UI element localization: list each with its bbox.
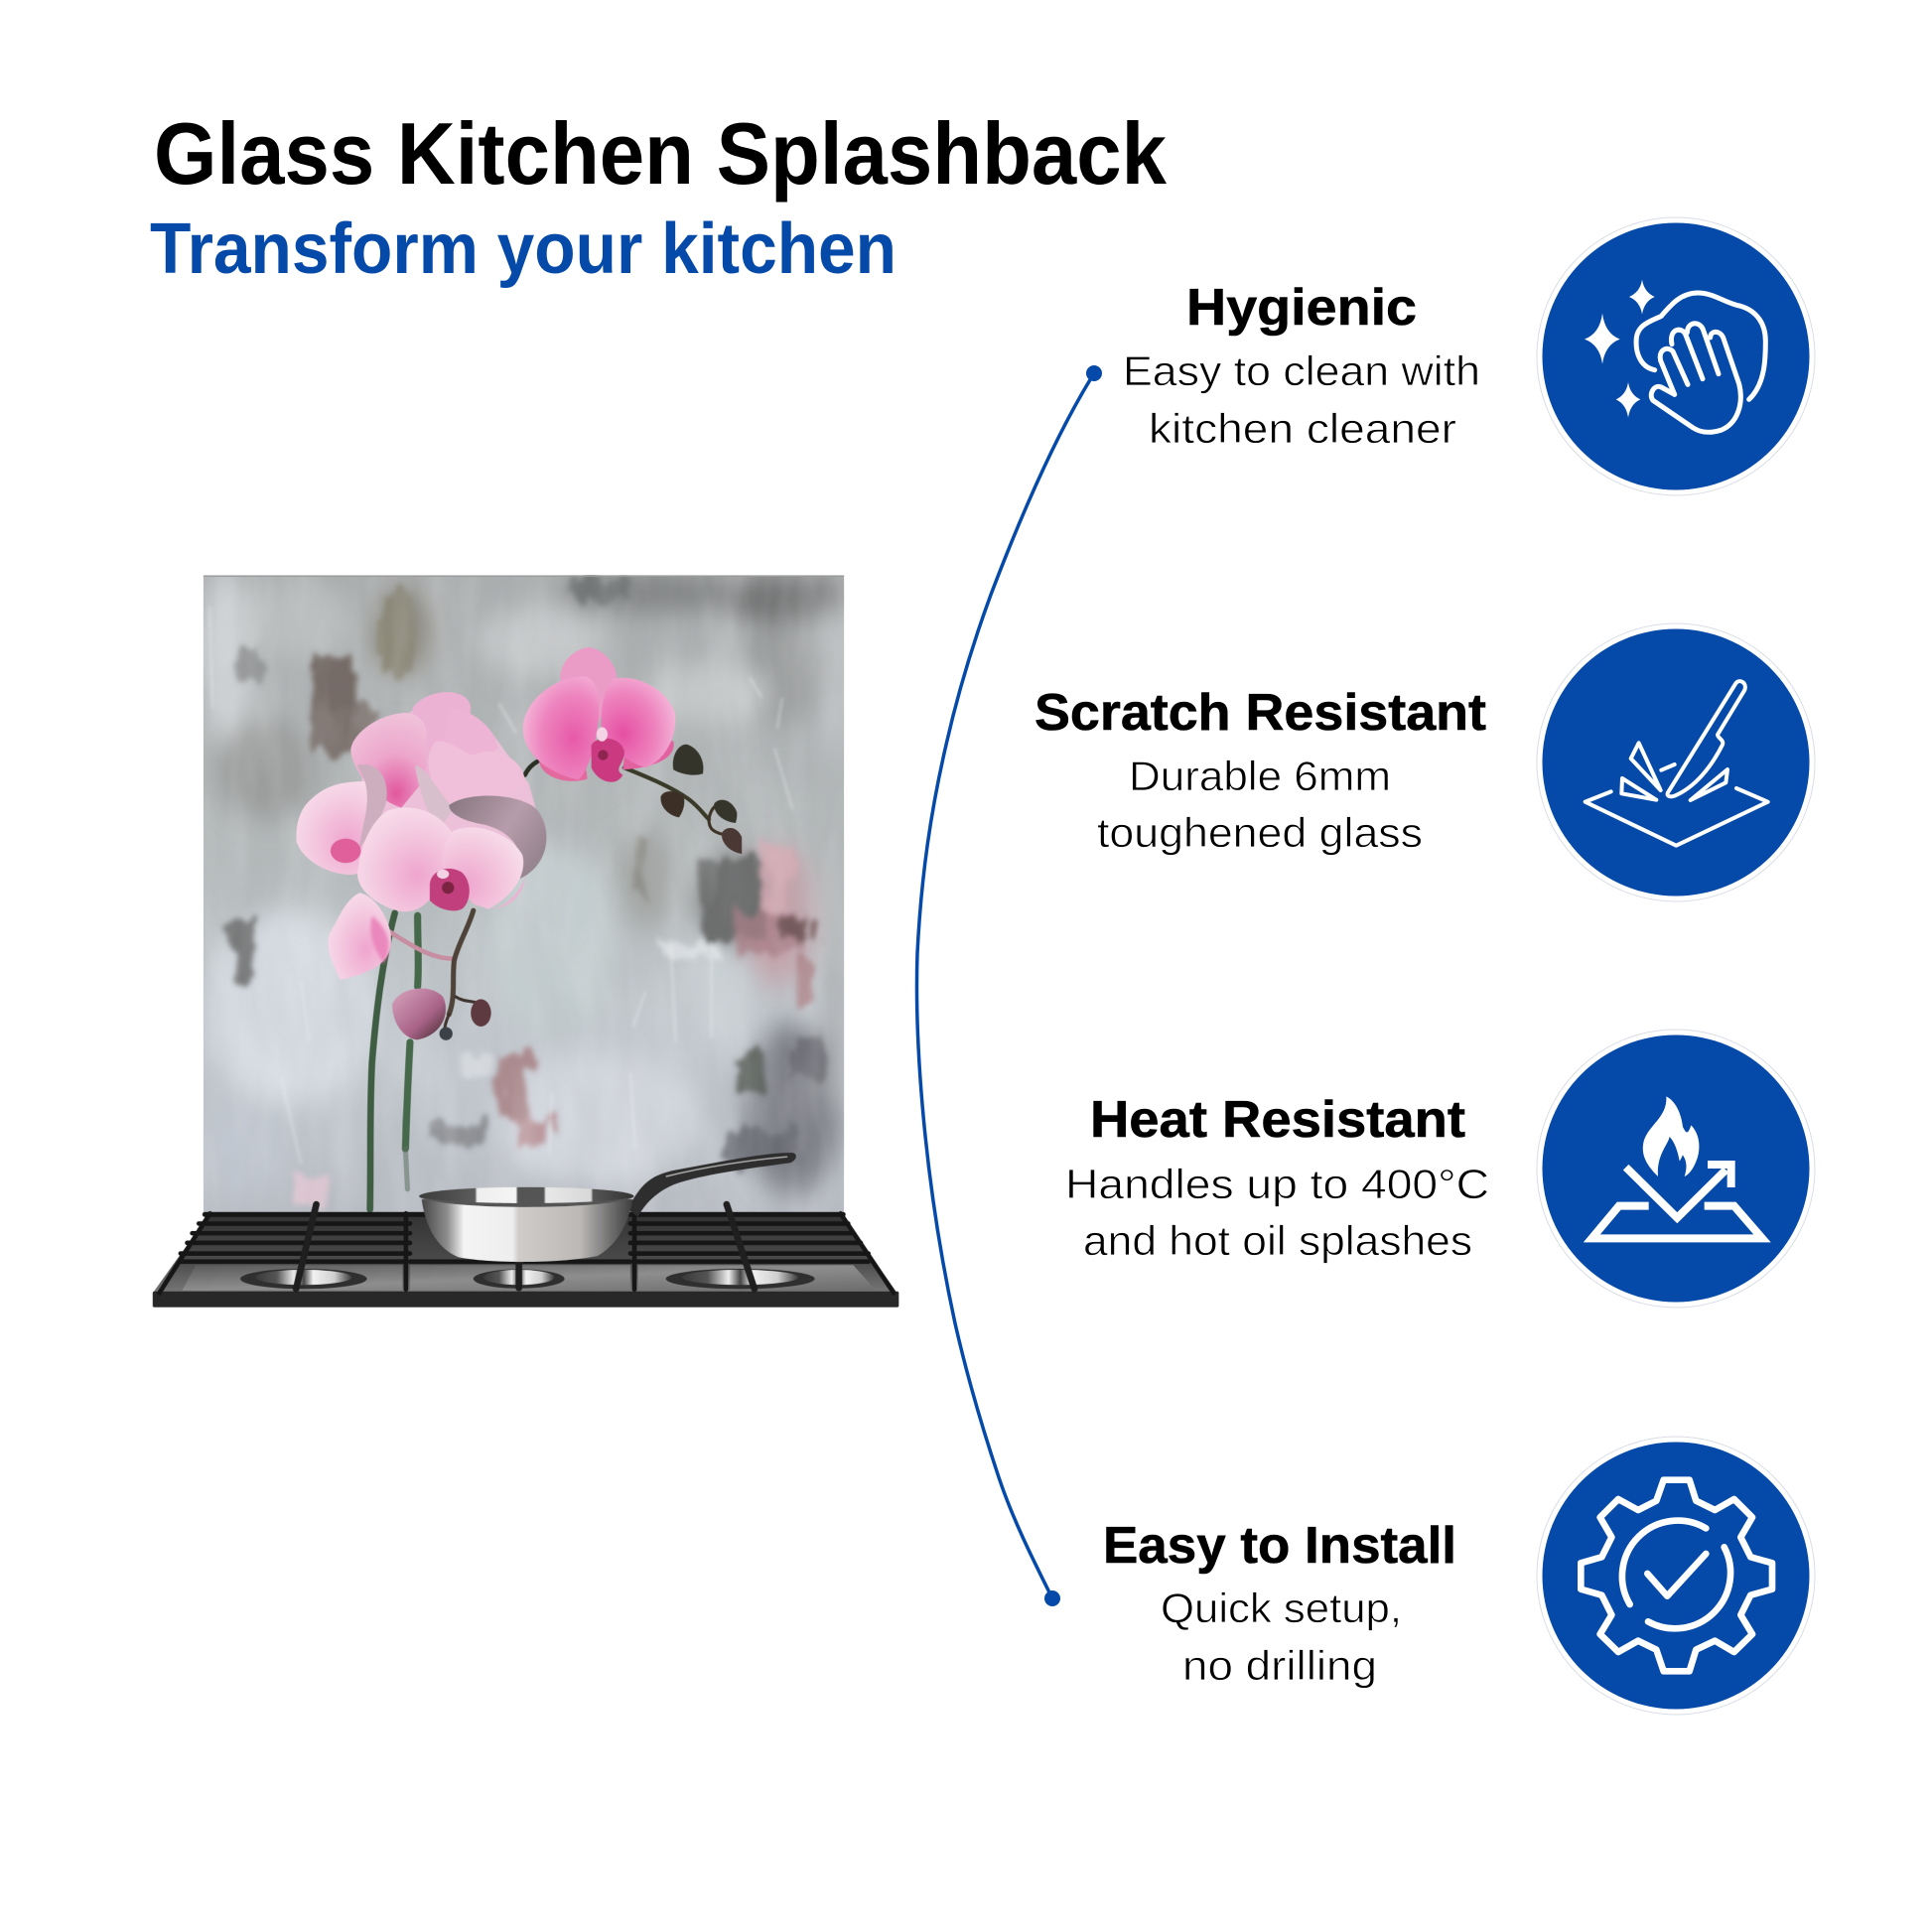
orchid: flower cluster xyxy=(296,692,546,980)
orchid: buds on the right arch xyxy=(660,745,742,854)
icon: gear with check mark xyxy=(1537,1437,1815,1715)
icon: hand wiping with sparkles xyxy=(1537,217,1815,495)
subtitle: Transform your kitchen xyxy=(150,209,897,289)
product image: orchid splashback above gas hob xyxy=(153,566,898,1308)
feature text: Easy to Install xyxy=(1103,1517,1456,1689)
icon: flame with arrow on surface xyxy=(1537,1030,1815,1308)
feature text: Hygienic: Hygienic xyxy=(1186,279,1417,337)
feature text: Hygienic: Easy to clean with xyxy=(1123,347,1480,394)
orchid stems xyxy=(370,761,724,1209)
feature text: Heat Resistant: Heat Resistant xyxy=(1090,1091,1465,1149)
feature text: Easy to Install: Quick setup, xyxy=(1161,1585,1402,1631)
orchid: lower buds xyxy=(392,989,491,1040)
feature text: Heat Resistant: Handles up to 400°C xyxy=(1065,1161,1489,1207)
feature text: Hygienic xyxy=(1123,279,1480,452)
glass panel painting xyxy=(203,566,848,1214)
connector curve with end dots xyxy=(916,365,1102,1606)
feature text: Easy to Install: Easy to Install xyxy=(1103,1517,1456,1575)
frying pan xyxy=(419,1153,796,1262)
gas hob xyxy=(153,1204,898,1308)
feature text: Heat Resistant: and hot oil splashes xyxy=(1083,1217,1472,1264)
feature text: Scratch Resistant: toughened glass xyxy=(1097,809,1423,856)
feature text: Scratch Resistant: Scratch Resistant xyxy=(1035,684,1486,742)
icon: knife on glass surface xyxy=(1537,623,1815,901)
title: Glass Kitchen Splashback xyxy=(154,104,1168,203)
feature text: Heat Resistant xyxy=(1065,1091,1489,1264)
feature text: Scratch Resistant xyxy=(1035,684,1486,856)
orchid: upper right flower xyxy=(523,647,675,782)
feature text: Easy to Install: no drilling xyxy=(1182,1642,1377,1689)
feature text: Hygienic: kitchen cleaner xyxy=(1149,405,1456,452)
feature text: Scratch Resistant: Durable 6mm xyxy=(1129,753,1391,799)
